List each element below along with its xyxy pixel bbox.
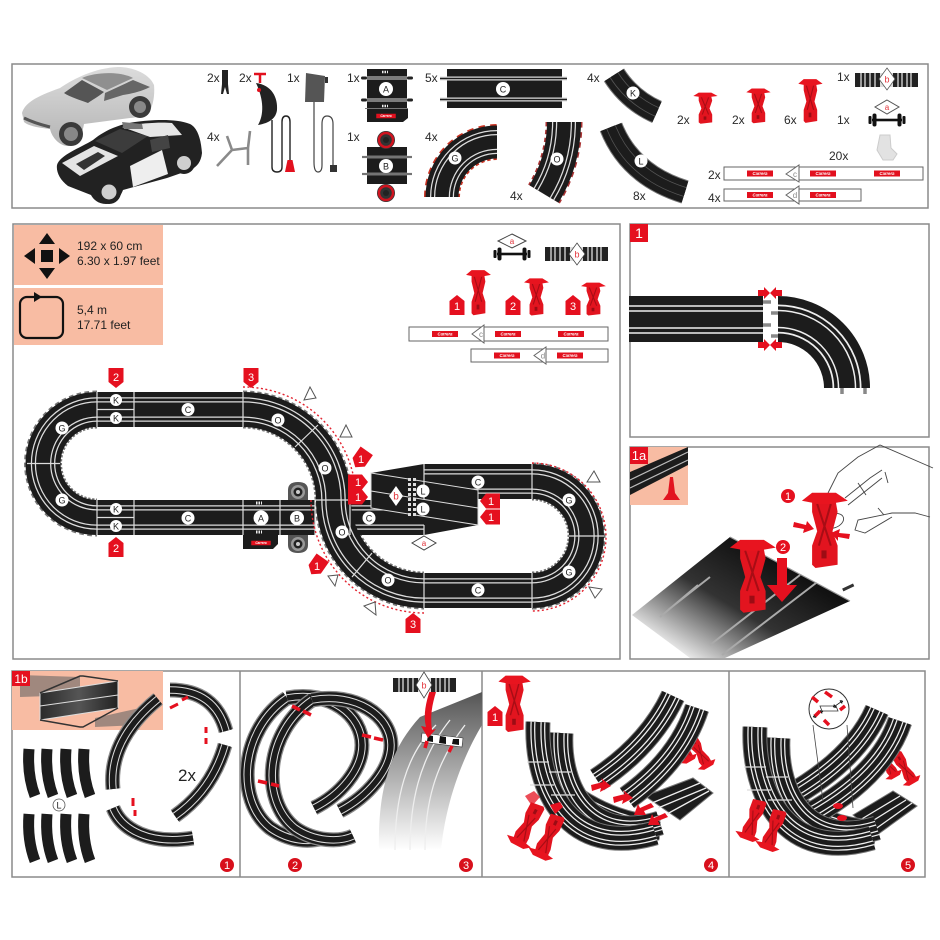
track clip <box>877 135 897 160</box>
upper curved tracks <box>597 696 697 798</box>
badge: step 3: 3 <box>463 860 469 872</box>
pylon and marker 1: 1 <box>492 712 498 724</box>
step badge 1: 1 <box>785 491 791 503</box>
step badge 2: 2 <box>780 542 786 554</box>
track piece K: K <box>630 88 636 98</box>
track letters: B <box>294 514 300 524</box>
step 1 joints and arrows <box>133 697 206 816</box>
panel: step 1a pylon fitting <box>630 445 933 659</box>
overpass L pieces <box>371 473 478 525</box>
size legend: 192 x 60 cm <box>77 239 142 253</box>
strip triangle markers <box>304 387 602 615</box>
main circuit <box>43 410 587 590</box>
hand <box>820 445 933 533</box>
track letters: G <box>58 424 66 434</box>
track letters: G <box>565 496 573 506</box>
inset: overpass <box>12 671 163 730</box>
quantity labels: 2x <box>732 113 745 127</box>
loose pylon <box>802 493 848 568</box>
track letters: G <box>58 496 66 506</box>
track letters <box>56 394 576 596</box>
curved track <box>778 319 847 388</box>
badge: step 1 <box>220 858 234 872</box>
border strip d <box>724 186 861 204</box>
step badge 1 <box>781 489 795 503</box>
upper curved tracks <box>787 710 900 815</box>
front loop tracks <box>527 722 660 838</box>
legend: pylon 3 <box>566 283 606 316</box>
track letters: K <box>113 414 119 424</box>
red pylon markers: 3 <box>410 619 416 631</box>
panel: step 1 connect tracks <box>629 224 929 437</box>
label 1b <box>12 671 30 686</box>
bridge a: a <box>885 103 890 112</box>
lower straight pieces <box>570 795 660 828</box>
track letters: C <box>185 514 192 524</box>
border strip c: c <box>793 170 797 179</box>
joint red marks <box>833 803 847 821</box>
step 3 small arrows <box>425 741 452 752</box>
quantity labels: 2x <box>207 71 220 85</box>
ramps <box>371 464 478 535</box>
legend: pylon 1 <box>450 270 491 315</box>
step 5 assembly <box>734 689 922 872</box>
front pylons <box>505 798 571 863</box>
bridge b: b <box>884 74 890 84</box>
quantity labels: 2x <box>677 113 690 127</box>
quantity labels: 2x <box>239 71 252 85</box>
quantity labels: 4x <box>708 191 721 205</box>
loose L tracks <box>29 749 90 861</box>
quantity labels: 8x <box>633 189 646 203</box>
track letters: C <box>475 478 482 488</box>
track letters: O <box>338 528 346 538</box>
border strip c <box>724 165 923 182</box>
quantity labels: 4x <box>510 189 523 203</box>
bridge b <box>855 68 918 90</box>
track piece B: B <box>383 162 389 172</box>
red pylon markers: 1 <box>358 454 364 466</box>
track letters: b <box>393 492 399 502</box>
badge: step 3 <box>459 858 473 872</box>
badge: step 2 <box>288 858 302 872</box>
lower middle straight <box>350 516 424 518</box>
icon: guide keel <box>221 70 229 94</box>
legend: bridge b <box>545 243 608 265</box>
lower straight pieces <box>787 800 875 832</box>
track piece A: A <box>383 84 389 94</box>
border strip d: d <box>793 191 797 200</box>
quantity labels: 4x <box>587 71 600 85</box>
right stand pylons <box>871 744 922 789</box>
quantity labels <box>207 70 850 205</box>
track piece A <box>361 69 413 122</box>
legend: pylon 2: 2 <box>510 301 516 313</box>
track letters: a <box>422 539 427 548</box>
label 1a: 1a <box>632 448 647 463</box>
badge 1: 1 <box>635 225 643 241</box>
quantity labels: 1x <box>837 70 850 84</box>
right stand pylons <box>666 728 717 773</box>
down arrow <box>767 558 797 602</box>
finish piece A tab <box>243 503 278 549</box>
track piece K <box>614 75 657 112</box>
quantity labels: 20x <box>829 149 848 163</box>
red dotted borders <box>243 387 606 613</box>
sheriff police car <box>57 120 202 204</box>
track letters: O <box>274 416 282 426</box>
step 3 curved red arrow <box>421 690 436 738</box>
red pylon markers: 1 <box>488 496 494 508</box>
quantity labels: 2x <box>708 168 721 182</box>
quantity labels: 4x <box>425 130 438 144</box>
track letters: G <box>565 568 573 578</box>
step 2 rings <box>247 696 391 840</box>
red pylon markers: 1 <box>314 561 320 573</box>
red pylon markers: 2 <box>113 543 119 555</box>
front pylons <box>734 795 792 854</box>
badge: step 2: 2 <box>292 860 298 872</box>
track piece C: C <box>500 84 507 94</box>
step 1 ring <box>113 690 226 840</box>
track letters: A <box>258 514 264 524</box>
L label: L <box>56 800 62 810</box>
red pylon markers: 2 <box>113 372 119 384</box>
track under pylon <box>632 537 854 658</box>
step 3 strip b <box>393 672 456 698</box>
right straight pieces <box>645 778 713 820</box>
silver sports car <box>22 67 154 146</box>
step badge 2 <box>776 540 790 554</box>
step 3 faded track <box>379 692 482 850</box>
red pylon markers: 1 <box>355 492 361 504</box>
legend: strip d <box>471 347 608 364</box>
length legend: 5,4 m <box>77 303 107 317</box>
icon: power adapter <box>305 73 337 172</box>
legend: bridge b: b <box>574 250 580 260</box>
magnifier <box>809 689 853 808</box>
track piece G <box>442 142 497 197</box>
race track layout <box>27 392 604 608</box>
quantity labels: 1x <box>287 71 300 85</box>
bridge a <box>868 100 906 126</box>
track seams <box>27 392 604 608</box>
badge: step 4: 4 <box>708 860 714 872</box>
size legend <box>14 225 163 285</box>
legend: bridge a: a <box>510 237 515 246</box>
legend: strip c: c <box>479 330 483 339</box>
front loop tracks <box>744 727 877 843</box>
panel: track layout <box>13 224 620 659</box>
squeeze arrows <box>793 521 850 541</box>
step 3 bridge strip <box>421 733 463 747</box>
right straight pieces <box>853 791 917 835</box>
red pylon markers: 1 <box>488 512 494 524</box>
legend: pylon 1: 1 <box>454 301 460 313</box>
quantity labels: 6x <box>784 113 797 127</box>
legend: pylon 3: 3 <box>570 301 576 313</box>
length legend <box>14 288 163 345</box>
legend: pylon 2 <box>506 278 549 316</box>
pylon and marker 1 <box>488 676 531 732</box>
grey curve borders <box>43 410 587 590</box>
straight track <box>629 296 763 342</box>
label 1b: 1b <box>14 672 28 686</box>
L label <box>53 799 65 811</box>
track letters: C <box>475 586 482 596</box>
quantity labels: 5x <box>425 71 438 85</box>
legend: strip c <box>409 325 608 343</box>
track letters: C <box>366 514 373 524</box>
quantity labels: 4x <box>207 130 220 144</box>
legend: strip d: d <box>541 352 545 360</box>
connector pins <box>763 302 865 394</box>
size legend: 6.30 x 1.97 feet <box>77 254 160 268</box>
badge: step 5: 5 <box>905 860 911 872</box>
badge: step 4 <box>704 858 718 872</box>
quantity labels: 1x <box>347 130 360 144</box>
legend: bridge a <box>494 234 530 260</box>
red arrows <box>525 778 668 825</box>
track piece C <box>440 69 567 108</box>
badge: step 5 <box>901 858 915 872</box>
red pylon markers <box>108 368 500 633</box>
icon: hand controller <box>254 74 295 172</box>
track piece G: G <box>451 154 459 164</box>
quantity labels: 1x <box>837 113 850 127</box>
badge 1 <box>630 224 648 242</box>
icon: lane support <box>217 131 250 166</box>
track letters: C <box>185 405 192 415</box>
red pylon markers: 1 <box>355 477 361 489</box>
track piece O: O <box>553 154 561 164</box>
track piece B <box>362 131 412 202</box>
seated pylon <box>730 540 776 613</box>
red pylon markers: 3 <box>248 372 254 384</box>
track letters: O <box>321 464 329 474</box>
length legend: 17.71 feet <box>77 318 131 332</box>
track piece L: L <box>638 156 644 166</box>
track letters: L <box>420 504 426 514</box>
track piece O <box>544 122 564 194</box>
badge: step 1: 1 <box>224 860 230 872</box>
track letters: K <box>113 396 119 406</box>
track letters: K <box>113 522 119 532</box>
step 2 arrows <box>258 706 383 786</box>
track piece L <box>611 127 685 192</box>
track letters: L <box>420 486 426 496</box>
panel: loop assembly <box>12 671 925 877</box>
step 4 assembly <box>488 676 718 872</box>
red arrows <box>758 287 782 351</box>
red pylons <box>693 79 823 124</box>
text: 2x: 2x <box>178 766 196 785</box>
quantity labels: 1x <box>347 71 360 85</box>
panel: parts list <box>12 64 928 208</box>
lap counters <box>288 482 308 553</box>
track letters: O <box>384 576 392 586</box>
inset: side view <box>630 447 688 505</box>
step 3 strip b: b <box>421 680 427 690</box>
track letters: K <box>113 504 119 514</box>
